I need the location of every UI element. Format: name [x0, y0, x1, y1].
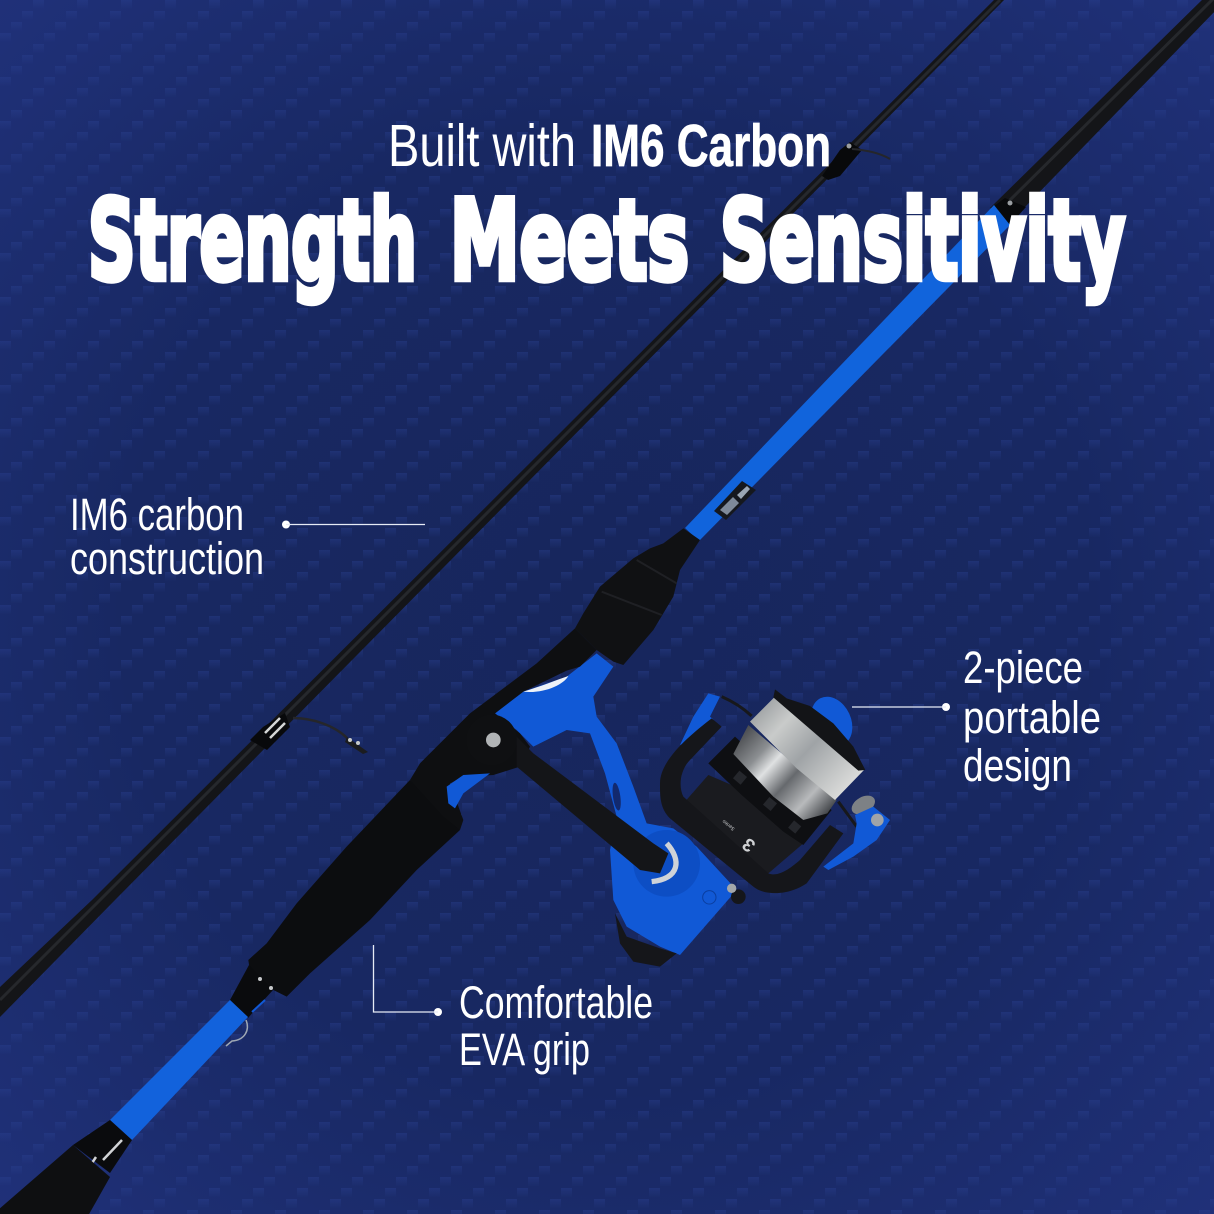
- stepped rotor cup: [708, 737, 832, 845]
- icon: lower line guide: [250, 713, 368, 754]
- callout: 2-piece portable design: [852, 642, 1101, 791]
- reel seat blue frame: [495, 653, 737, 955]
- callout: IM6 carbon construction: [70, 489, 425, 584]
- upper rod section: [0, 0, 1006, 1017]
- subtitle: Built with: [388, 113, 576, 179]
- blue bail bracket left: [680, 693, 720, 745]
- callout: 2-piece portable design: 2-piece: [963, 642, 1083, 693]
- callout: 2-piece portable design: portable: [963, 692, 1101, 743]
- spinning reel head: [660, 689, 890, 893]
- callout: 2-piece portable design: design: [963, 740, 1072, 791]
- callout: Comfortable EVA grip: Comfortable: [459, 977, 653, 1028]
- reel foot: [615, 913, 677, 967]
- threaded locking nut: [575, 528, 700, 665]
- blue rear cap: [803, 690, 860, 753]
- lower blue blank: [110, 1000, 248, 1140]
- reel size number: 3: [738, 834, 759, 857]
- black reel seat: [410, 628, 597, 830]
- title: [88, 113, 1125, 306]
- anti-reverse switch: [727, 884, 746, 904]
- main heading: Strength: [88, 177, 417, 306]
- main EVA grip: [248, 780, 460, 997]
- subtitle: IM6 Carbon: [591, 113, 831, 179]
- icon: upper line guide: [822, 142, 890, 180]
- butt section and lower grip: [0, 1120, 132, 1214]
- callout: IM6 carbon construction: IM6 carbon: [70, 489, 244, 540]
- blue rod blank: [685, 205, 1010, 541]
- bail wires: [722, 697, 857, 827]
- monofilament fishing line on spool: [750, 697, 864, 800]
- blue lower insert: [447, 773, 490, 808]
- reel seat and handle assembly: [410, 528, 746, 967]
- blue bail bracket right with roller: [823, 792, 890, 870]
- chrome highlight on seat: [523, 676, 568, 692]
- callout: Comfortable EVA grip: [374, 945, 653, 1075]
- reel handle arm: [466, 715, 676, 882]
- rod tip section above the blue blank: [990, 0, 1214, 225]
- main heading: Meets: [450, 177, 689, 306]
- callout: IM6 carbon construction: construction: [70, 533, 264, 584]
- spool top lip: [773, 689, 865, 771]
- metal spool skirt: [733, 725, 837, 820]
- black lower rotor body: Series: [721, 818, 736, 831]
- rod label sticker: [714, 481, 756, 520]
- lower winding check: [230, 965, 273, 1018]
- callout: Comfortable EVA grip: EVA grip: [459, 1024, 590, 1075]
- bail arm: [660, 718, 843, 893]
- black lower rotor body: [685, 775, 803, 873]
